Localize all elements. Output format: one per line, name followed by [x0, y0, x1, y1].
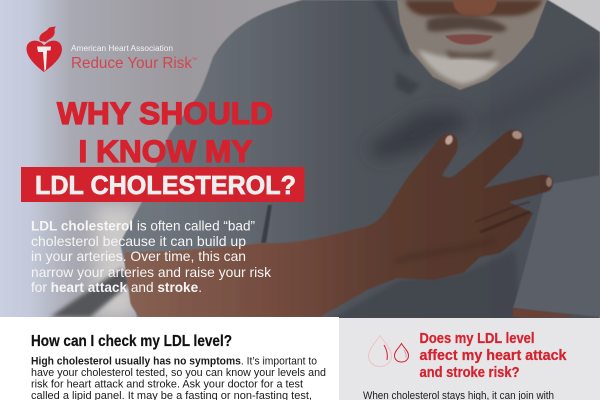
- panel heading: affect my heart attack: [420, 347, 567, 364]
- intro text: cholesterol because it can build up: [31, 233, 246, 249]
- section: how can I check my LDL level: [0, 317, 339, 400]
- panel heading: [420, 330, 567, 381]
- section heading: How can I check my LDL level?: [31, 333, 232, 350]
- panel: does my LDL level affect risk: [339, 318, 600, 400]
- logo tagline: Reduce Your Risk: [71, 55, 192, 72]
- photo: grey shirt: [120, 0, 600, 330]
- logo: American Heart Association Reduce Your Risk: [26, 26, 197, 72]
- intro text: [31, 218, 272, 295]
- photo: face and beard: [397, 0, 547, 90]
- title: [57, 95, 273, 169]
- photo: right sleeve: [513, 175, 600, 317]
- intro text: for heart attack and stroke.: [31, 279, 202, 295]
- logo wordmark: American Heart Association: [71, 44, 173, 53]
- section body text: [31, 356, 326, 400]
- panel heading: Does my LDL level: [420, 330, 534, 347]
- icon: heart and torch: [26, 26, 62, 72]
- panel heading: and stroke risk?: [420, 364, 520, 381]
- photo: shirt folds and shadows: [261, 0, 600, 320]
- section body text: have your cholesterol tested, so you can know your levels and: [31, 367, 326, 379]
- logo: American Heart Association Reduce Your Risk: TM: [192, 57, 197, 61]
- section body text: risk for heart attack and stroke. Ask your doctor for a test: [31, 378, 303, 390]
- icon: blood drops: [368, 336, 408, 366]
- intro text: in your arteries. Over time, this can: [31, 248, 246, 264]
- intro text: narrow your arteries and raise your risk: [31, 264, 272, 280]
- photo: forearm and hand: [125, 130, 553, 317]
- section body text: High cholesterol usually has no symptoms. It’s important to: [31, 356, 317, 368]
- title: I KNOW MY: [78, 133, 252, 169]
- title: WHY SHOULD: [57, 95, 273, 131]
- intro text: LDL cholesterol is often called “bad”: [31, 218, 255, 234]
- title banner: LDL cholesterol: LDL CHOLESTEROL?: [35, 172, 296, 200]
